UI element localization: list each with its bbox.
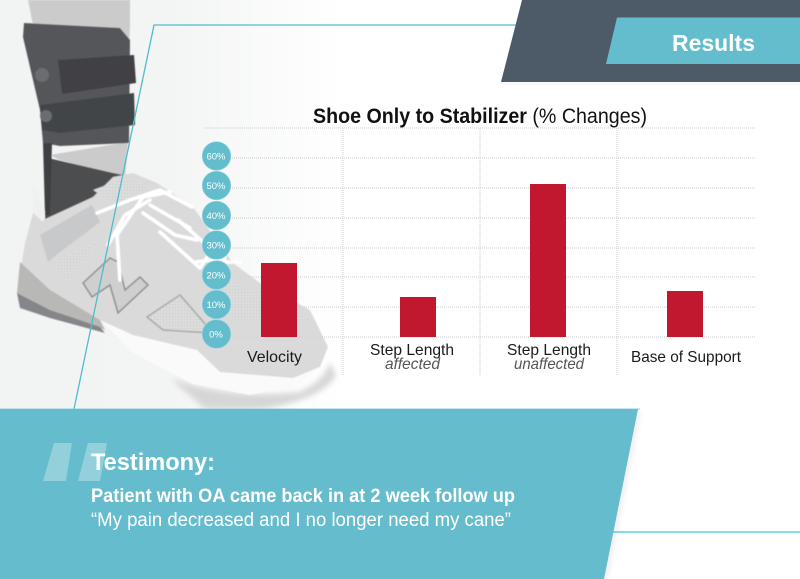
bar: base of support [667, 291, 703, 337]
bar: step length affected [400, 297, 436, 337]
results heading: Results [672, 30, 755, 56]
chart title: Shoe Only to Stabilizer (% Changes) [313, 105, 647, 128]
y axis labels: 20% [206, 270, 226, 282]
y axis labels: 0% [209, 330, 223, 340]
testimony subheading: Patient with OA came back in at 2 week follow up [91, 486, 515, 507]
y axis labels: 60% [206, 152, 226, 162]
chart gridlines [204, 128, 755, 375]
brace straps [58, 55, 136, 94]
y axis labels: 50% [206, 181, 226, 192]
photo: ankle stabilizer brace and shoe [17, 0, 336, 409]
y axis labels [202, 142, 231, 348]
y axis labels: 40% [206, 211, 226, 222]
bar: velocity [261, 263, 297, 337]
category labels: Base of Support [631, 349, 742, 366]
brace upright [43, 143, 52, 215]
shoe upper [17, 173, 328, 393]
shoe midsole [100, 320, 322, 395]
category labels: affected [385, 356, 441, 373]
shoe ground shadow [170, 362, 336, 409]
shoe mesh panels [50, 240, 100, 282]
category labels [247, 342, 742, 373]
sock [28, 0, 130, 178]
testimony panel [0, 409, 640, 579]
category labels: Velocity [247, 349, 302, 366]
category labels: Step Length [370, 342, 454, 359]
brace shell [23, 23, 130, 146]
shoe collar [33, 183, 45, 222]
testimony heading: Testimony: [91, 449, 215, 476]
category labels: Step Length [507, 342, 591, 359]
y axis labels: 10% [206, 300, 226, 311]
frame line [74, 25, 523, 409]
chart [202, 105, 755, 375]
shoe heel wedge [17, 262, 105, 330]
header banner [501, 0, 800, 85]
patient quote: “My pain decreased and I no longer need my cane” [91, 510, 511, 531]
dark banner [501, 0, 800, 82]
bar: step length unaffected [530, 184, 566, 337]
category labels: unaffected [514, 356, 585, 373]
teal results tab [606, 18, 800, 64]
icon: quotation mark [43, 443, 107, 481]
y axis labels: 30% [206, 240, 226, 252]
shoe N logo [83, 258, 148, 313]
shoe laces [97, 190, 240, 280]
